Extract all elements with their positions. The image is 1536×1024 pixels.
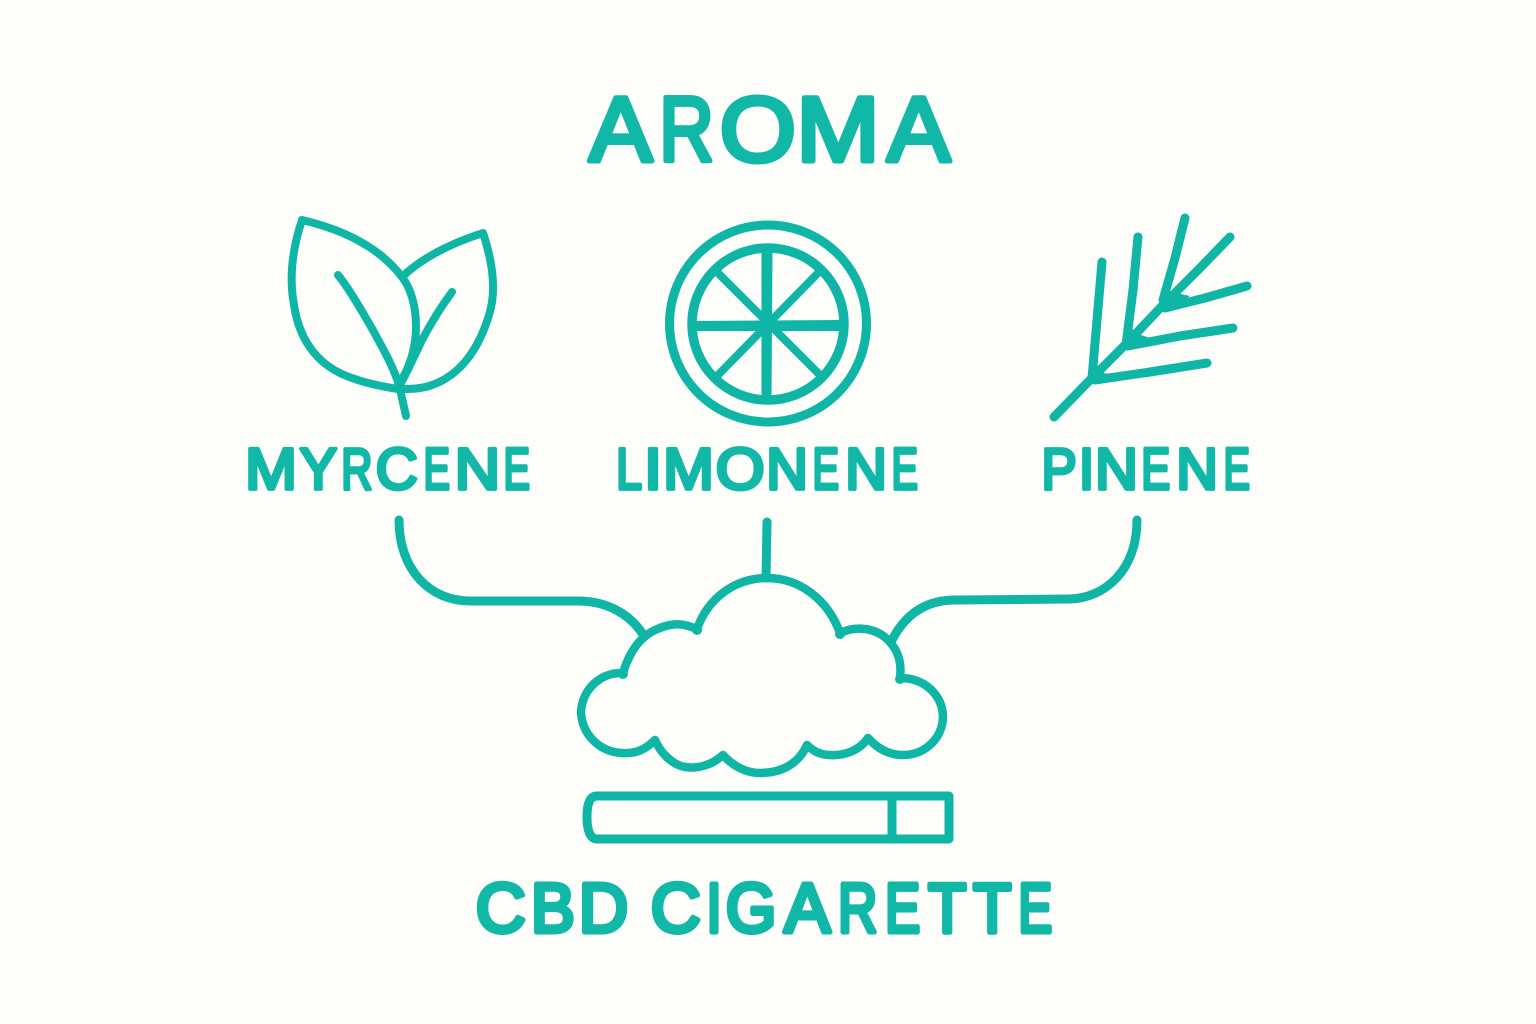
label: limonene: O [716, 437, 765, 502]
icon: cigarette [587, 796, 949, 839]
title [589, 79, 951, 181]
label: myrcene: N [455, 437, 500, 502]
label: cbd cigarette: G [726, 869, 776, 947]
label: cbd cigarette: I [706, 869, 722, 947]
label: limonene: L [616, 437, 642, 502]
label: limonene: E [892, 437, 918, 502]
label: cbd cigarette: E [1018, 869, 1052, 947]
label: myrcene [245, 437, 530, 502]
label: limonene: M [663, 437, 714, 502]
label: limonene: N [845, 437, 887, 502]
label: pinene: E [1141, 437, 1170, 502]
icon: pinene pine sprig [1054, 218, 1247, 417]
label: pinene [1042, 437, 1250, 502]
label: limonene: N [766, 437, 808, 502]
label: limonene: E [812, 437, 839, 502]
label: myrcene: E [504, 437, 530, 502]
label: cbd cigarette: T [973, 869, 1011, 947]
title: O [720, 79, 796, 181]
label: cbd cigarette: D [579, 869, 628, 947]
label: limonene: I [644, 437, 662, 502]
label: cbd cigarette [476, 869, 1052, 947]
connector: myrcene to cloud [399, 520, 642, 633]
title: R [659, 79, 714, 181]
connector: limonene to cloud [766, 522, 767, 578]
label: cbd cigarette: R [838, 869, 877, 947]
icon: smoke cloud [581, 578, 943, 773]
label: pinene: E [1224, 437, 1250, 502]
label: pinene: P [1042, 437, 1077, 502]
label: cbd cigarette: C [476, 869, 526, 947]
label: pinene: N [1095, 437, 1138, 502]
connector: pinene to cloud [892, 520, 1137, 640]
label: myrcene: E [424, 437, 450, 502]
label: cbd cigarette: B [531, 869, 575, 947]
label: cbd cigarette: T [928, 869, 966, 947]
icon: myrcene leaves [292, 220, 493, 416]
label: pinene: I [1079, 437, 1094, 502]
label: limonene [616, 437, 918, 502]
label: pinene: N [1176, 437, 1218, 502]
title: A [887, 79, 951, 181]
label: cbd cigarette: A [784, 869, 830, 947]
label: myrcene: R [341, 437, 372, 502]
label: cbd cigarette: C [651, 869, 701, 947]
label: myrcene: Y [300, 437, 337, 502]
label: myrcene: M [245, 437, 297, 502]
icon: limonene citrus slice [670, 225, 866, 422]
label: cbd cigarette: E [885, 869, 920, 947]
title: A [589, 79, 653, 181]
label: myrcene: C [376, 437, 418, 502]
title: M [796, 79, 880, 181]
